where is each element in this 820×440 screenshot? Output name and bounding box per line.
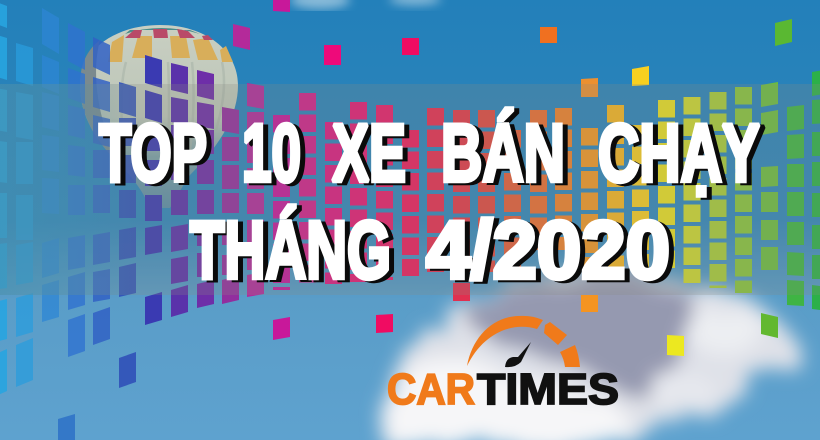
title line 1: TOP (99, 108, 207, 199)
icon: hot air balloon (80, 25, 238, 208)
wordmark: TIMES (477, 365, 619, 414)
translucent band (0, 84, 820, 295)
title line 1: 10 (242, 108, 301, 199)
title line 1: BÁN (441, 108, 565, 199)
mosaic grid: centre columns from magenta to green (282, 87, 744, 293)
title line 2: 4/2020 (426, 205, 670, 296)
logo: CarTimes (387, 316, 619, 414)
cloud (384, 270, 802, 440)
title line 2 (190, 205, 670, 296)
wordmark: CAR (387, 365, 475, 414)
mosaic grid: right green columns (761, 69, 820, 311)
top clouds (290, 0, 441, 9)
mosaic grid: left blue and violet columns (0, 0, 264, 398)
title (99, 108, 760, 296)
title line 1: XE (332, 108, 406, 199)
title line 2: THÁNG (190, 205, 391, 296)
title line 1 (99, 108, 760, 199)
icon: speedometer gauge (467, 316, 580, 367)
